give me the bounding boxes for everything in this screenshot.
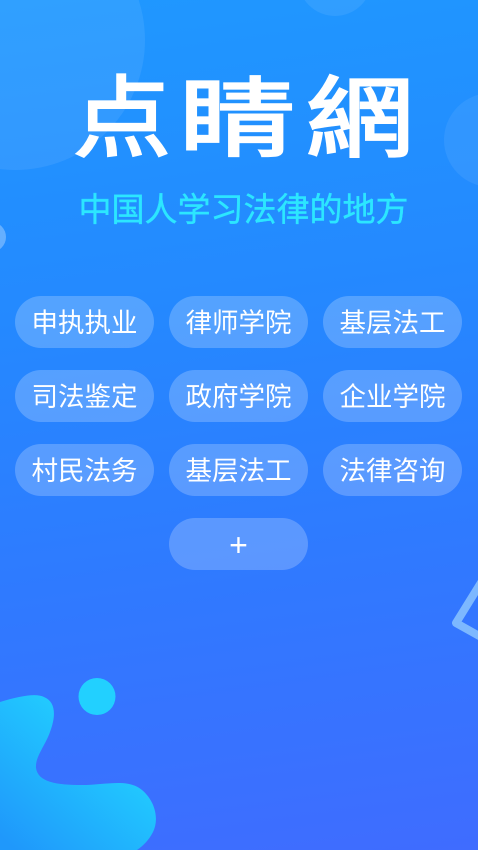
more button xyxy=(169,518,308,570)
button: 政府学院 xyxy=(186,382,292,412)
button xyxy=(323,296,462,348)
subtitle: 中国人学习法律的地方 xyxy=(78,191,408,228)
button xyxy=(15,370,154,422)
button xyxy=(15,444,154,496)
button: 申执执业 xyxy=(32,308,138,338)
title: 網 xyxy=(306,48,414,175)
title xyxy=(73,46,414,176)
category buttons xyxy=(15,296,462,570)
more button: + xyxy=(229,527,248,563)
button xyxy=(15,296,154,348)
button xyxy=(323,444,462,496)
button xyxy=(169,370,308,422)
button: 司法鉴定 xyxy=(32,382,138,412)
button: 法律咨询 xyxy=(340,456,446,486)
button: 律师学院 xyxy=(186,308,292,338)
title: 点 xyxy=(73,46,171,176)
button xyxy=(169,296,308,348)
button: 基层法工 xyxy=(186,456,292,486)
button xyxy=(323,370,462,422)
title: 睛 xyxy=(179,49,296,174)
button: 村民法务 xyxy=(32,456,138,486)
button: 企业学院 xyxy=(340,382,446,412)
button: 基层法工 xyxy=(340,308,446,338)
button xyxy=(169,444,308,496)
